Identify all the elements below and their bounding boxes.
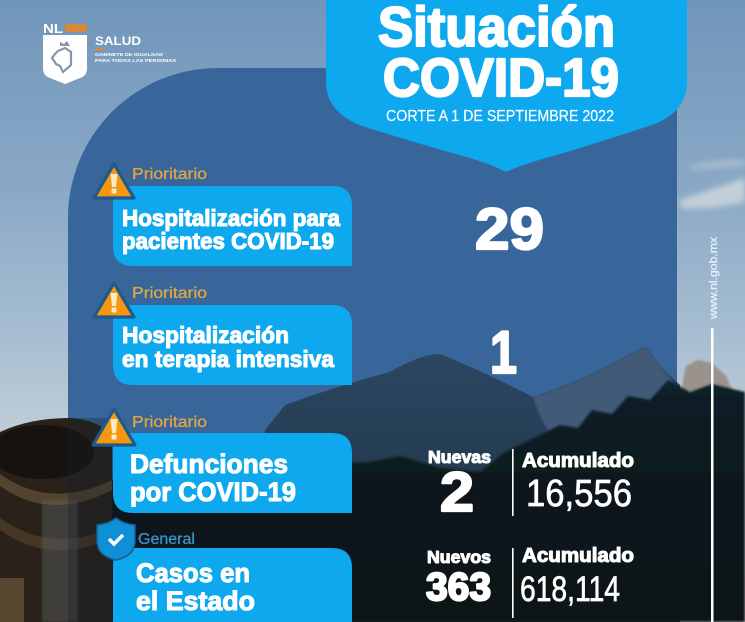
panel: hospitalization COVID-19: pacientes COVID-19 [122, 228, 334, 254]
tag: Prioritario 1: Prioritario [132, 166, 207, 183]
value: deaths: Acumulado [522, 450, 634, 472]
tree silhouettes [110, 380, 745, 622]
panel: cases: el Estado [136, 586, 255, 616]
tag: Prioritario 2: Prioritario [132, 285, 207, 302]
label: hospitalization: Hospitalización para [122, 205, 341, 231]
website url: www.nl.gob.mx [708, 236, 720, 320]
value: 29: 29 [475, 197, 544, 262]
lower panel tint over fountain [68, 418, 113, 622]
distant rock peak [682, 360, 733, 392]
value: 1: 1 [490, 319, 517, 386]
panel: dark blue backdrop [68, 68, 677, 622]
title: COVID-19: COVID-19 [383, 48, 619, 108]
logo: Nuevo León shield [43, 22, 87, 84]
icon: warning triangle 1 [94, 164, 134, 198]
logo text: Salud: GABINETE DE IGUALDAD [95, 52, 163, 57]
panel: cases [113, 548, 352, 622]
value: deaths: Nuevas [428, 447, 491, 467]
panel: intensive care: en terapia intensiva [122, 346, 335, 372]
tag: General: General [138, 531, 195, 548]
panel: intensive care [113, 305, 352, 385]
panel: deaths [113, 433, 352, 513]
tag: Prioritario 3: Prioritario [132, 414, 207, 431]
fountain sculpture [0, 418, 112, 622]
panel: hospitalization COVID-19 [113, 186, 352, 266]
panel: deaths: por COVID-19 [130, 477, 296, 507]
logo: Nuevo León shield: NL [43, 22, 63, 36]
lit mountain face [533, 347, 672, 450]
icon: warning triangle 2 [94, 283, 134, 317]
icon: warning triangle 3 [93, 409, 135, 445]
value: cases: 618,114 [520, 570, 620, 609]
logo text: Salud: SALUD [95, 36, 141, 48]
value: cases [426, 545, 634, 618]
label: cases: Casos en [136, 558, 250, 588]
mountains [265, 347, 680, 622]
value: deaths [428, 447, 634, 523]
label: intensive care: Hospitalización [122, 322, 289, 348]
vertical white line [711, 328, 714, 622]
title banner [326, 0, 687, 172]
value: cases: Nuevos [427, 547, 491, 567]
value: cases: Acumulado [522, 545, 634, 567]
value: cases: 363 [426, 566, 491, 609]
logo text: Salud [95, 36, 176, 63]
clouds [680, 160, 745, 208]
value: deaths: 16,556 [526, 473, 632, 515]
icon: shield check [97, 518, 135, 560]
value: deaths: 2 [440, 460, 474, 523]
label: deaths: Defunciones [130, 449, 288, 479]
date line: CORTE A 1 DE SEPTIEMBRE 2022 [386, 108, 614, 125]
logo text: Salud: PARA TODAS LAS PERSONAS [95, 58, 176, 63]
